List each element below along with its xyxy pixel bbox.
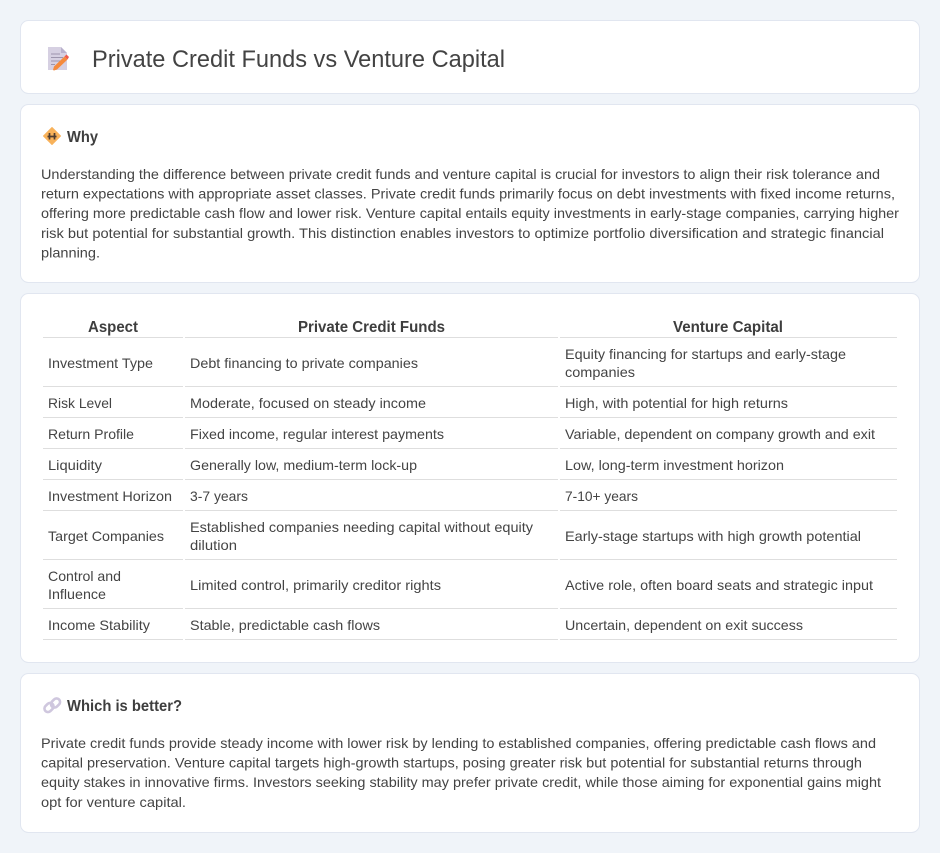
row: return profile: Variable, dependent on company growth and exit	[565, 426, 875, 442]
row: income stability: Income Stability	[48, 617, 150, 633]
text block: why explanation: offering more predictable cash flow and lower risk. Venture capital entails equity investments in early-stage companies, carrying higher	[41, 205, 899, 221]
panel: why	[20, 104, 920, 282]
row: investment horizon: 7-10+ years	[565, 488, 638, 504]
row: risk level: Risk Level	[48, 395, 112, 411]
row: target companies	[48, 519, 861, 553]
row: investment horizon	[48, 488, 638, 504]
title: Private Credit Funds vs Venture Capital	[92, 46, 505, 73]
header panel	[20, 20, 920, 94]
row: control and influence: Active role, often board seats and strategic input	[565, 577, 873, 593]
row: income stability: Stable, predictable cash flows	[190, 617, 380, 633]
panel: comparison table	[20, 294, 920, 662]
text block: verdict: Private credit funds provide steady income with lower risk by lending to established companies, offering predictable cash flows and	[41, 735, 876, 751]
row: investment type: Investment Type	[48, 355, 153, 371]
text block: verdict: equity stakes in innovative firms. Investors seeking stability may prefer private credit, while those aiming for exponential gains might	[41, 774, 881, 790]
text block: verdict	[41, 735, 881, 810]
row: investment type: Equity financing for startups and early-stage	[565, 346, 846, 362]
row: return profile	[48, 426, 875, 442]
row: control and influence: Influence	[48, 586, 106, 602]
row: liquidity: Generally low, medium-term lock-up	[190, 457, 417, 473]
icon: chain link	[43, 697, 62, 714]
row: investment type: companies	[565, 364, 635, 380]
row: income stability	[48, 617, 803, 633]
panel: which is better	[20, 674, 920, 832]
row: investment horizon: Investment Horizon	[48, 488, 172, 504]
table header row: Private Credit Funds	[298, 319, 445, 336]
icon: diamond sign	[44, 128, 60, 144]
row: investment type: Debt financing to private companies	[190, 355, 418, 371]
row: return profile: Return Profile	[48, 426, 134, 442]
row: liquidity: Low, long-term investment horizon	[565, 457, 784, 473]
text block: why explanation: Understanding the difference between private credit funds and venture capital is crucial for investors to align their risk tolerance and	[41, 166, 880, 182]
row: risk level: High, with potential for high returns	[565, 395, 788, 411]
row: liquidity	[48, 457, 784, 473]
row: investment type	[48, 346, 846, 380]
table header row: Venture Capital	[673, 319, 783, 336]
row: control and influence: Limited control, primarily creditor rights	[190, 577, 441, 593]
row: target companies: Early-stage startups with high growth potential	[565, 528, 861, 544]
row: return profile: Fixed income, regular interest payments	[190, 426, 444, 442]
table header row	[88, 319, 783, 336]
text block: why explanation: planning.	[41, 244, 100, 260]
row: risk level: Moderate, focused on steady income	[190, 395, 426, 411]
row: target companies: Established companies needing capital without equity	[190, 519, 533, 535]
text block: verdict: capital preservation. Venture capital targets high-growth startups, posing greater risk but potential for substantial returns through	[41, 755, 862, 771]
row: target companies: Target Companies	[48, 528, 164, 544]
text block: why explanation: risk but potential for substantial growth. This distinction enables investors to optimize portfolio diversification and strategic financial	[41, 225, 884, 241]
row: control and influence: Control and	[48, 568, 121, 584]
text block: why explanation	[41, 166, 899, 260]
icon: document with pencil	[48, 47, 69, 70]
table header row: Aspect	[88, 319, 139, 336]
row: target companies: dilution	[190, 537, 237, 553]
text block: verdict: opt for venture capital.	[41, 794, 186, 810]
row: income stability: Uncertain, dependent on exit success	[565, 617, 803, 633]
heading: which is better: Which is better?	[67, 698, 182, 715]
text block: why explanation: return expectations with appropriate asset classes. Private credit funds primarily focus on debt investments with fixed income returns,	[41, 186, 895, 202]
row: risk level	[48, 395, 788, 411]
row: investment horizon: 3-7 years	[190, 488, 248, 504]
heading: why: Why	[67, 129, 98, 146]
row: liquidity: Liquidity	[48, 457, 102, 473]
row: control and influence	[48, 568, 873, 602]
table rules	[43, 337, 897, 640]
